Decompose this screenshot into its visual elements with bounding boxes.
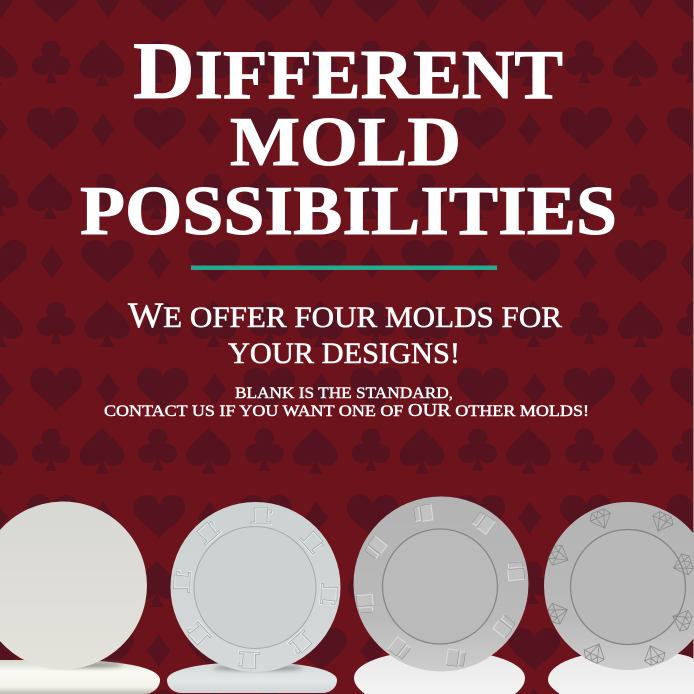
diamond icons bbox=[546, 507, 694, 667]
subheading bbox=[128, 295, 562, 370]
title: POSSIBILITIES bbox=[80, 173, 617, 250]
square icons bbox=[356, 504, 525, 667]
chip: cup mold bbox=[167, 502, 340, 693]
title bbox=[80, 25, 617, 250]
note text: CONTACT US IF YOU WANT ONE OF OUR OTHER MOLDS! bbox=[104, 400, 589, 420]
divider bar bbox=[191, 266, 497, 270]
cup icons bbox=[174, 508, 337, 668]
title: MOLD bbox=[230, 104, 461, 181]
title: DIFFERENT bbox=[133, 25, 563, 116]
note text: BLANK IS THE STANDARD, bbox=[235, 385, 453, 402]
subheading: YOUR DESIGNS! bbox=[228, 337, 460, 370]
subheading: WE OFFER FOUR MOLDS FOR bbox=[128, 295, 562, 335]
chip: diamond mold bbox=[544, 502, 694, 694]
note text bbox=[104, 385, 589, 420]
chip: square mold bbox=[354, 496, 528, 694]
chip: blank mold bbox=[0, 502, 160, 694]
